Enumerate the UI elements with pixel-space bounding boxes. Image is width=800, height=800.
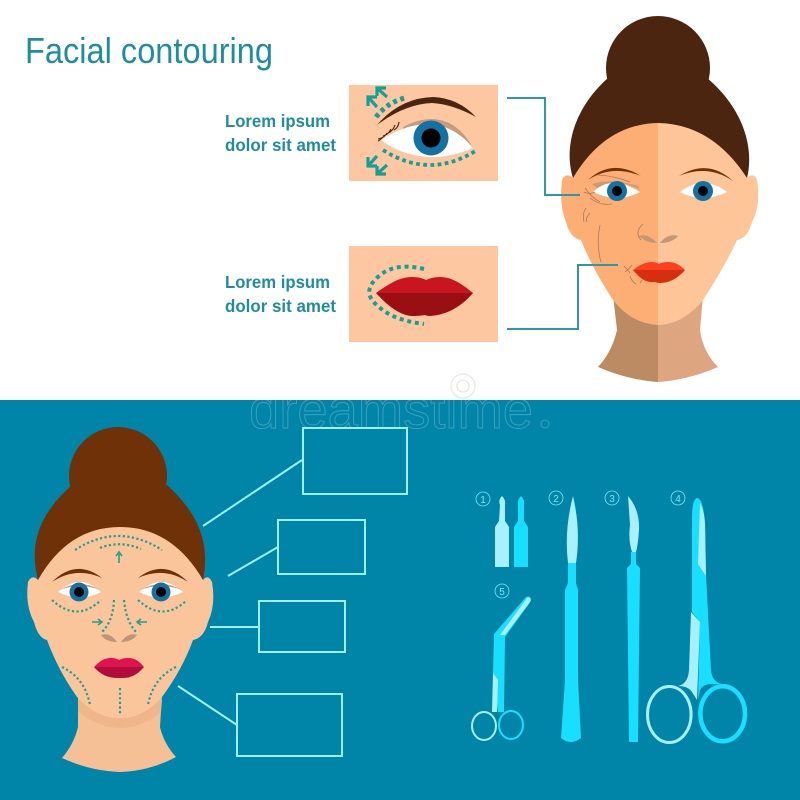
- tool 5: angled scissors: [472, 596, 531, 740]
- panel: lips detail: [349, 246, 498, 342]
- label: lips: Lorem ipsum: [225, 272, 330, 292]
- face: before and after: [561, 16, 758, 382]
- connector: lips to face: [507, 265, 618, 329]
- connector: eye to face: [507, 98, 580, 195]
- label: eye: dolor sit amet: [225, 135, 336, 155]
- label: lips: dolor sit amet: [225, 296, 336, 316]
- number markers: [476, 491, 685, 598]
- tool 3: scalpel curved: [627, 496, 640, 742]
- tool 1: ampoules: [495, 496, 528, 567]
- face: marked contour lines: [27, 427, 213, 772]
- empty label boxes with leader lines: [178, 428, 407, 756]
- label: eye: [225, 111, 336, 155]
- tool 4: scissors: [648, 498, 745, 742]
- number markers: 4: [675, 494, 681, 505]
- label: eye: Lorem ipsum: [225, 111, 330, 131]
- number markers: 3: [609, 494, 615, 505]
- title: Facial contouring: [25, 30, 273, 71]
- number markers: 5: [499, 587, 505, 598]
- label: lips: [225, 272, 336, 316]
- watermark: dreamstime: [249, 380, 533, 440]
- blue lower panel: [0, 400, 800, 800]
- tool 2: scalpel: [561, 496, 581, 742]
- number markers: 1: [480, 495, 486, 506]
- number markers: 2: [553, 494, 559, 505]
- panel: eye detail: [349, 85, 498, 181]
